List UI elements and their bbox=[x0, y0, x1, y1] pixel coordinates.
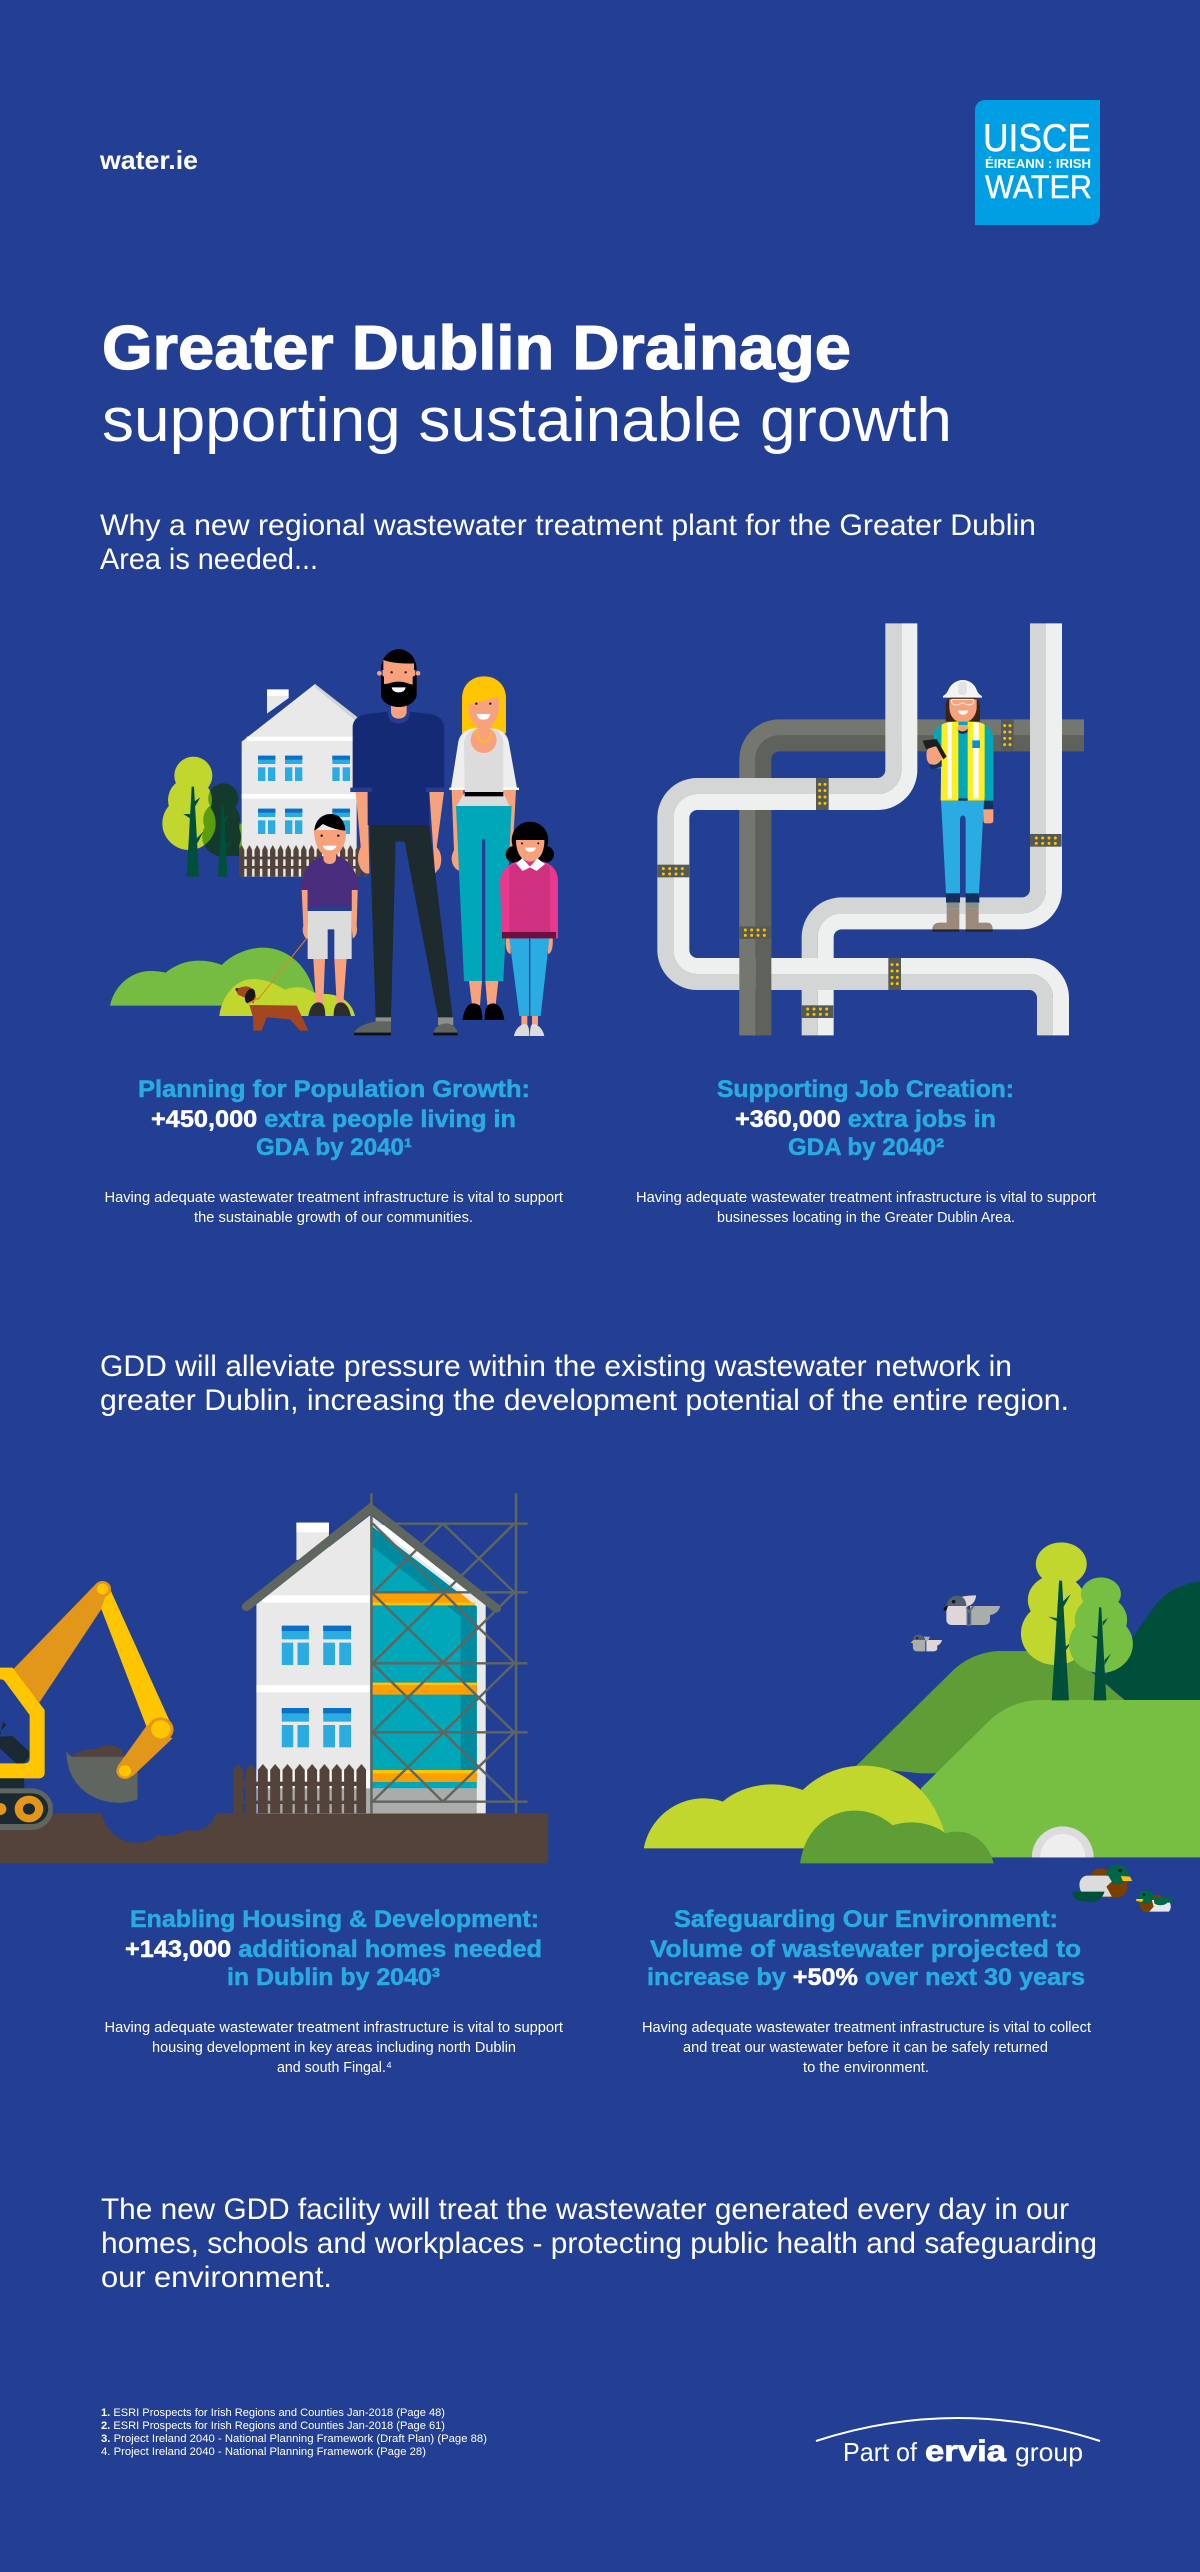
logo: part of Ervia group: group bbox=[1015, 2437, 1083, 2467]
trees bbox=[1021, 1542, 1133, 1700]
dark pipe lower section bbox=[739, 810, 771, 1035]
large duck bbox=[1072, 1864, 1132, 1902]
footnotes: 4. Project Ireland 2040 - National Planning Framework (Page 28) bbox=[101, 2446, 426, 2458]
girl bbox=[500, 822, 558, 1036]
text: safeguarding environment: to the environment. bbox=[803, 2059, 929, 2076]
paragraph: alleviate pressure bbox=[100, 1350, 1069, 1417]
title: Greater Dublin Drainage bbox=[102, 314, 851, 383]
pipe flanges bbox=[657, 719, 1062, 1018]
heading: housing and development bbox=[125, 1906, 542, 1991]
trees bbox=[162, 757, 248, 877]
heading: safeguarding environment: Safeguarding Our Environment: bbox=[674, 1906, 1058, 1933]
roof bbox=[246, 1508, 496, 1608]
heading: population growth: GDA by 2040¹ bbox=[256, 1134, 412, 1161]
logo: Uisce Eireann Irish Water bbox=[975, 100, 1100, 225]
text: housing and development: Having adequate wastewater treatment infrastructure is vital to support bbox=[104, 2019, 564, 2036]
white pipe long bbox=[665, 623, 1061, 1035]
ground bbox=[0, 1813, 548, 1863]
fence bbox=[233, 1764, 366, 1813]
heading: population growth bbox=[138, 1076, 530, 1161]
dog on a lead bbox=[235, 938, 308, 1031]
hills bbox=[855, 1582, 1200, 1857]
dark pipe bbox=[747, 727, 1084, 1035]
fence bbox=[239, 845, 369, 877]
white pipe right bbox=[810, 623, 1054, 1035]
footnotes: 3. Project Ireland 2040 - National Planning Framework (Draft Plan) (Page 88) bbox=[101, 2433, 487, 2445]
paragraph: alleviate pressure: greater Dublin, increasing the development potential of the entire region. bbox=[100, 1384, 1069, 1417]
heading: safeguarding environment: increase by +50% over next 30 years bbox=[647, 1964, 1085, 1991]
title: supporting sustainable growth bbox=[102, 386, 952, 455]
text: job creation: businesses locating in the Greater Dublin Area. bbox=[717, 1209, 1015, 1226]
house with cladding bbox=[256, 1515, 486, 1813]
heading: job creation: Supporting Job Creation: bbox=[717, 1076, 1014, 1103]
bushes bbox=[644, 1766, 994, 1863]
text: housing and development: and south Fingal.⁴ bbox=[277, 2059, 392, 2076]
text: population growth bbox=[104, 1189, 564, 1226]
intro text: Area is needed... bbox=[100, 543, 318, 576]
heading: safeguarding environment: Volume of wastewater projected to bbox=[650, 1936, 1081, 1963]
logo: Uisce Eireann Irish Water: ÉIREANN : IRISH bbox=[985, 156, 1091, 171]
heading: job creation bbox=[717, 1076, 1014, 1161]
small duck bbox=[1136, 1890, 1174, 1912]
text: population growth: the sustainable growth of our communities. bbox=[194, 1209, 473, 1226]
text: job creation: Having adequate wastewater treatment infrastructure is vital to support bbox=[636, 1189, 1097, 1206]
illustration: excavator and house under construction bbox=[0, 1493, 548, 1863]
title bbox=[102, 314, 952, 455]
website address: water.ie bbox=[99, 145, 198, 175]
paragraph: alleviate pressure: GDD will alleviate pressure within the existing wastewater network in bbox=[100, 1350, 1012, 1383]
heading: housing and development: Enabling Housing & Development: bbox=[130, 1906, 539, 1933]
heading: job creation: GDA by 2040² bbox=[788, 1134, 944, 1161]
footnotes bbox=[101, 2407, 487, 2458]
text: population growth: Having adequate wastewater treatment infrastructure is vital to support bbox=[104, 1189, 564, 1206]
footnotes: 1. ESRI Prospects for Irish Regions and Counties Jan-2018 (Page 48) bbox=[101, 2407, 445, 2419]
worker bbox=[923, 680, 993, 932]
heading: safeguarding environment bbox=[647, 1906, 1085, 1991]
illustration: family in front of house bbox=[110, 649, 558, 1036]
heading: population growth: +450,000 extra people living in bbox=[151, 1106, 516, 1133]
excavator bbox=[0, 1581, 174, 1830]
logo: Uisce Eireann Irish Water: UISCE bbox=[983, 117, 1091, 160]
text: safeguarding environment: and treat our wastewater before it can be safely returned bbox=[683, 2039, 1048, 2056]
closing paragraph bbox=[101, 2193, 1097, 2294]
heading: housing and development: in Dublin by 2040³ bbox=[227, 1964, 440, 1991]
text: housing and development: housing development in key areas including north Dublin bbox=[152, 2039, 516, 2056]
intro text: Why a new regional wastewater treatment plant for the Greater Dublin bbox=[100, 509, 1036, 542]
text: job creation bbox=[636, 1189, 1097, 1226]
footnotes: 2. ESRI Prospects for Irish Regions and Counties Jan-2018 (Page 61) bbox=[101, 2420, 445, 2432]
intro text bbox=[100, 509, 1036, 576]
illustration: hills, trees, birds and ducks bbox=[644, 1542, 1200, 1912]
text: safeguarding environment: Having adequate wastewater treatment infrastructure is vital to collect bbox=[642, 2019, 1092, 2036]
text: safeguarding environment bbox=[642, 2019, 1092, 2076]
logo: part of Ervia group: Part of bbox=[843, 2437, 918, 2467]
large bird bbox=[943, 1595, 1000, 1625]
heading: job creation: +360,000 extra jobs in bbox=[735, 1106, 996, 1133]
closing paragraph: our environment. bbox=[101, 2261, 332, 2294]
scaffolding bbox=[371, 1493, 527, 1813]
heading: population growth: Planning for Population Growth: bbox=[138, 1076, 530, 1103]
logo: Uisce Eireann Irish Water: WATER bbox=[985, 169, 1092, 205]
bushes bbox=[110, 948, 355, 1016]
woman bbox=[449, 676, 519, 1020]
logo: part of Ervia group bbox=[816, 2418, 1100, 2468]
text: housing and development bbox=[104, 2019, 564, 2076]
small bird bbox=[911, 1635, 942, 1651]
closing paragraph: homes, schools and workplaces - protecting public health and safeguarding bbox=[101, 2227, 1097, 2260]
outfall culvert bbox=[1032, 1826, 1094, 1857]
closing paragraph: The new GDD facility will treat the wastewater generated every day in our bbox=[101, 2193, 1069, 2226]
boy bbox=[300, 814, 359, 1016]
house bbox=[242, 684, 360, 877]
heading: housing and development: +143,000 additional homes needed bbox=[125, 1936, 542, 1963]
illustration: pipes and worker bbox=[657, 623, 1084, 1035]
logo: part of Ervia group: ervia bbox=[925, 2435, 1006, 2468]
man bbox=[350, 649, 458, 1035]
